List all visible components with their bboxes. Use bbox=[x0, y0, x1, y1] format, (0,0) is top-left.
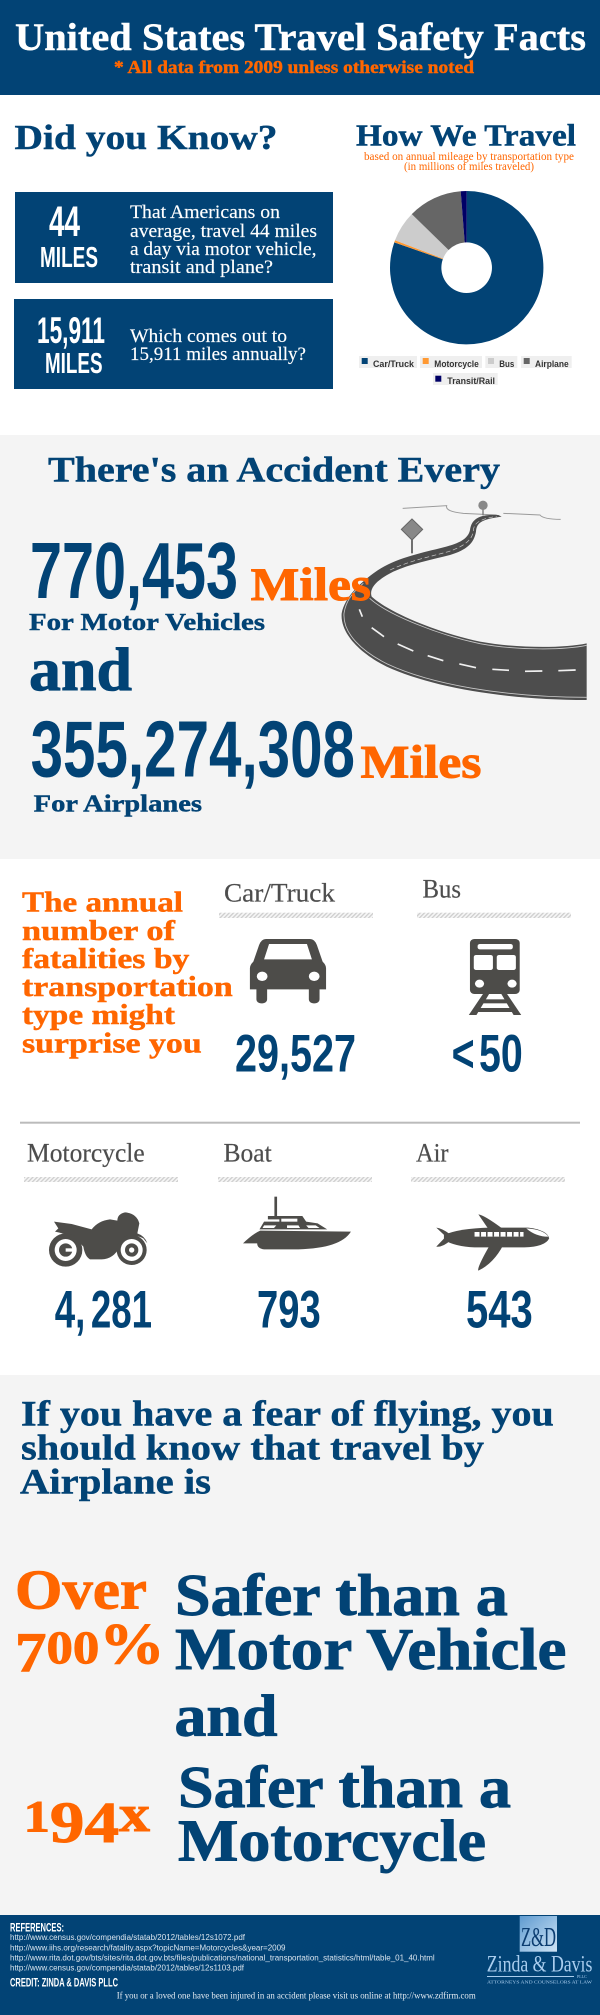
heading: annual fatalities: surprise you bbox=[22, 1028, 202, 1060]
connector word: and: and bbox=[29, 637, 132, 704]
stat: motor vehicles: For Motor Vehicles bbox=[29, 610, 265, 636]
callout: 44 miles: transit and plane? bbox=[130, 257, 273, 278]
stat: bus: Bus bbox=[422, 875, 461, 904]
icon: car bbox=[250, 939, 326, 1003]
callout: 15,911 miles: MILES bbox=[45, 348, 102, 380]
stat: over 700%: Over bbox=[15, 1560, 147, 1622]
footer bbox=[0, 1915, 600, 2015]
text: safer than a motorcycle: Motorcycle bbox=[178, 1808, 486, 1874]
references: http://www.rita.dot.gov/bts/sites/rita.dot.gov.bts/files/publications/national_transportation_statistics/html/table_01_40.html bbox=[10, 1954, 435, 1963]
chart subtitle: (in millions of miles traveled) bbox=[404, 159, 534, 173]
references: REFERENCES: bbox=[10, 1923, 64, 1935]
subtitle note: * All data from 2009 unless otherwise noted bbox=[114, 57, 474, 77]
references: http://www.iihs.org/research/fatality.aspx?topicName=Motorcycles&year=2009 bbox=[10, 1944, 286, 1953]
donut chart bbox=[390, 191, 543, 344]
title: United States Travel Safety Facts bbox=[15, 16, 586, 59]
references: http://www.census.gov/compendia/statab/2012/tables/12s1072.pdf bbox=[10, 1933, 246, 1942]
heading: annual fatalities bbox=[22, 887, 233, 1060]
stat: car/truck bbox=[219, 879, 373, 1084]
stat: over 700%: % bbox=[99, 1611, 165, 1676]
callout: 44 miles bbox=[15, 192, 333, 283]
panel: how we travel bbox=[356, 118, 576, 387]
stat: boat: Boat bbox=[224, 1139, 272, 1168]
icon: airplane bbox=[436, 1214, 549, 1271]
logo: zinda & davis bbox=[487, 1916, 593, 1984]
heading: annual fatalities: fatalities by bbox=[22, 943, 190, 975]
heading: annual fatalities: type might bbox=[22, 999, 175, 1031]
stat: airplanes: 355,274,308 bbox=[31, 705, 355, 794]
heading: fear of flying: should know that travel by bbox=[21, 1427, 484, 1467]
heading: fear of flying: If you have a fear of flying, you bbox=[21, 1394, 554, 1434]
stat: air bbox=[411, 1139, 565, 1340]
text: safer than a motor vehicle bbox=[175, 1562, 566, 1682]
stat: motor vehicles: 770,453 bbox=[30, 526, 238, 615]
stat: airplanes: For Airplanes bbox=[34, 792, 202, 818]
icon: train bbox=[469, 939, 521, 1015]
icon: motorcycle bbox=[49, 1212, 147, 1267]
chart subtitle: based on annual mileage by transportation type bbox=[364, 149, 574, 163]
logo: zinda & davis: Z&D bbox=[521, 1922, 556, 1952]
logo: zinda & davis: ATTORNEYS AND COUNSELORS AT LAW bbox=[487, 1979, 593, 1984]
heading: annual fatalities: transportation bbox=[22, 971, 233, 1003]
chart legend bbox=[359, 356, 572, 387]
stat: 194x: 1 bbox=[24, 1792, 46, 1841]
stat: motorcycle bbox=[24, 1139, 178, 1340]
callout: 15,911 miles: Which comes out to bbox=[130, 326, 287, 347]
stat: motor vehicles: Miles bbox=[251, 559, 371, 611]
callout: 44 miles: That Americans on bbox=[130, 202, 281, 223]
icon: boat bbox=[243, 1197, 351, 1249]
panel: accident frequency bbox=[0, 435, 600, 859]
heading: how we travel: How We Travel bbox=[356, 118, 576, 153]
visit note: If you or a loved one have been injured in an accident please visit us online at http://www.zdfirm.com bbox=[117, 1990, 476, 2001]
callout: 44 miles: MILES bbox=[40, 242, 98, 274]
stat: bus: <50 bbox=[452, 1025, 523, 1084]
chart legend: Transit/Rail bbox=[447, 376, 495, 387]
heading: did you know: Did you Know? bbox=[14, 118, 278, 157]
header banner bbox=[0, 0, 600, 95]
heading: there's an accident every: There's an Accident Every bbox=[48, 450, 500, 490]
stat: bus bbox=[417, 875, 571, 1084]
panel: fear of flying bbox=[0, 1375, 600, 1915]
heading: annual fatalities: number of bbox=[22, 915, 175, 947]
stat: car/truck: 29,527 bbox=[235, 1025, 356, 1084]
heading: fear of flying bbox=[20, 1394, 554, 1502]
callout: 15,911 miles: 15,911 bbox=[37, 310, 105, 351]
stat: boat bbox=[218, 1139, 372, 1340]
stat: motorcycle: Motorcycle bbox=[27, 1139, 145, 1168]
chart legend: Motorcycle bbox=[434, 359, 479, 370]
chart legend: Bus bbox=[499, 359, 514, 370]
text: safer than a motorcycle bbox=[178, 1754, 511, 1874]
references bbox=[10, 1923, 435, 1973]
text: safer than a motorcycle: Safer than a bbox=[178, 1754, 511, 1820]
chart legend: Car/Truck bbox=[373, 359, 415, 370]
stat: car/truck: Car/Truck bbox=[224, 879, 335, 908]
text: safer than a motor vehicle: Safer than a bbox=[175, 1562, 508, 1628]
callout: 44 miles: 44 bbox=[49, 198, 80, 246]
panel: annual fatalities bbox=[20, 875, 580, 1340]
stat: motorcycle: 4,281 bbox=[55, 1281, 152, 1340]
connector word: and: and bbox=[174, 1682, 278, 1748]
stat: 194x: x bbox=[119, 1786, 150, 1843]
chart legend: Airplane bbox=[535, 359, 569, 370]
logo: zinda & davis: PLLC bbox=[577, 1974, 587, 1979]
references: http://www.census.gov/compendia/statab/2012/tables/12s1103.pdf bbox=[10, 1964, 245, 1973]
stat: over 700% bbox=[15, 1560, 165, 1684]
callout: 44 miles: a day via motor vehicle, bbox=[130, 239, 316, 260]
stat: 194x: 94 bbox=[50, 1790, 119, 1855]
text: safer than a motor vehicle: Motor Vehicle bbox=[175, 1616, 566, 1682]
callout: 44 miles: average, travel 44 miles bbox=[130, 221, 317, 242]
credit: CREDIT: ZINDA & DAVIS PLLC bbox=[10, 1978, 118, 1990]
stat: over 700%: 00 bbox=[46, 1622, 99, 1674]
panel: did you know bbox=[14, 118, 333, 389]
callout: 15,911 miles: 15,911 miles annually? bbox=[130, 344, 306, 365]
stat: boat: 793 bbox=[257, 1281, 321, 1340]
stat: over 700%: 7 bbox=[15, 1622, 46, 1684]
heading: fear of flying: Airplane is bbox=[20, 1462, 211, 1502]
stat: airplanes: Miles bbox=[360, 737, 482, 789]
stat: air: 543 bbox=[466, 1281, 533, 1340]
callout: 15,911 miles bbox=[14, 299, 333, 389]
stat: air: Air bbox=[416, 1139, 449, 1168]
chart subtitle bbox=[364, 149, 574, 173]
illustration: winding road bbox=[342, 501, 587, 700]
heading: annual fatalities: The annual bbox=[22, 887, 183, 919]
stat: motor vehicles bbox=[29, 526, 371, 636]
